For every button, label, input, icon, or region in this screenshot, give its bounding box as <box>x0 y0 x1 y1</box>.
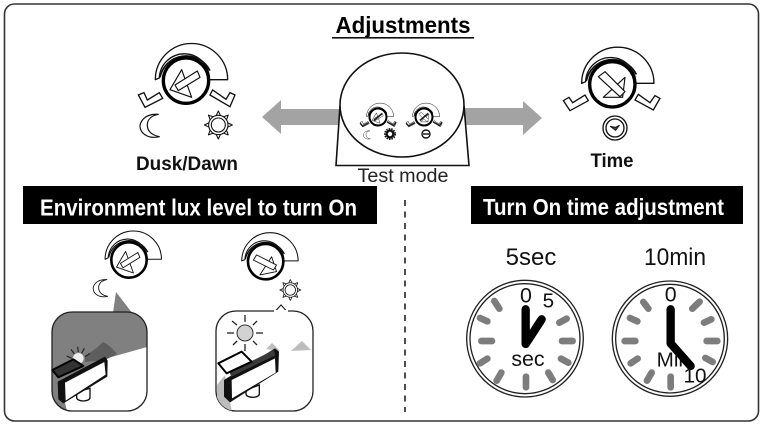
clock: 5 sec: 5 <box>543 289 554 312</box>
label: Time: Time <box>590 151 634 172</box>
time dial <box>563 47 660 140</box>
icon: clock <box>603 116 627 140</box>
small icon: moon <box>363 131 370 139</box>
lamp: day <box>218 348 279 402</box>
banner: environment lux level: Environment lux level to turn On <box>40 194 357 220</box>
sensor device <box>336 53 469 166</box>
banner: environment lux level <box>23 186 377 224</box>
clock: 5 sec <box>467 280 583 397</box>
small dial: time <box>406 103 442 127</box>
clock heading: 10min: 10min <box>644 244 706 271</box>
small icon: clock <box>422 130 430 138</box>
mountains <box>266 341 311 351</box>
night scene: bubble <box>52 292 147 412</box>
clock: 10 min <box>612 281 728 396</box>
clock: 5 sec: sec <box>511 347 545 371</box>
clock: 10 min: 10 <box>683 365 706 388</box>
label: Test mode: Test mode <box>358 166 448 187</box>
clock: 10 min: 0 <box>665 283 677 307</box>
arrow: right <box>464 101 542 135</box>
dashed divider <box>404 200 406 412</box>
small dial: dusk/dawn <box>360 103 396 127</box>
sun: day <box>227 315 263 351</box>
day scene: bubble <box>216 305 313 412</box>
title: Adjustments <box>336 12 470 38</box>
clock: 10 min: Min <box>657 348 690 371</box>
clock heading: 5sec: 5sec <box>506 244 556 271</box>
arrow: left <box>262 100 340 134</box>
clock: 5 sec: 0 <box>520 283 532 307</box>
banner: turn on time adjustment: Turn On time adjustment <box>483 194 724 220</box>
day scene: dial and sun <box>242 233 301 300</box>
dusk/dawn dial <box>138 43 235 139</box>
lamp: night <box>52 347 108 403</box>
banner: turn on time adjustment <box>471 186 743 224</box>
label: Dusk/Dawn: Dusk/Dawn <box>136 154 238 175</box>
small icon: sun <box>385 129 395 139</box>
night scene: dial and moon <box>93 231 161 297</box>
